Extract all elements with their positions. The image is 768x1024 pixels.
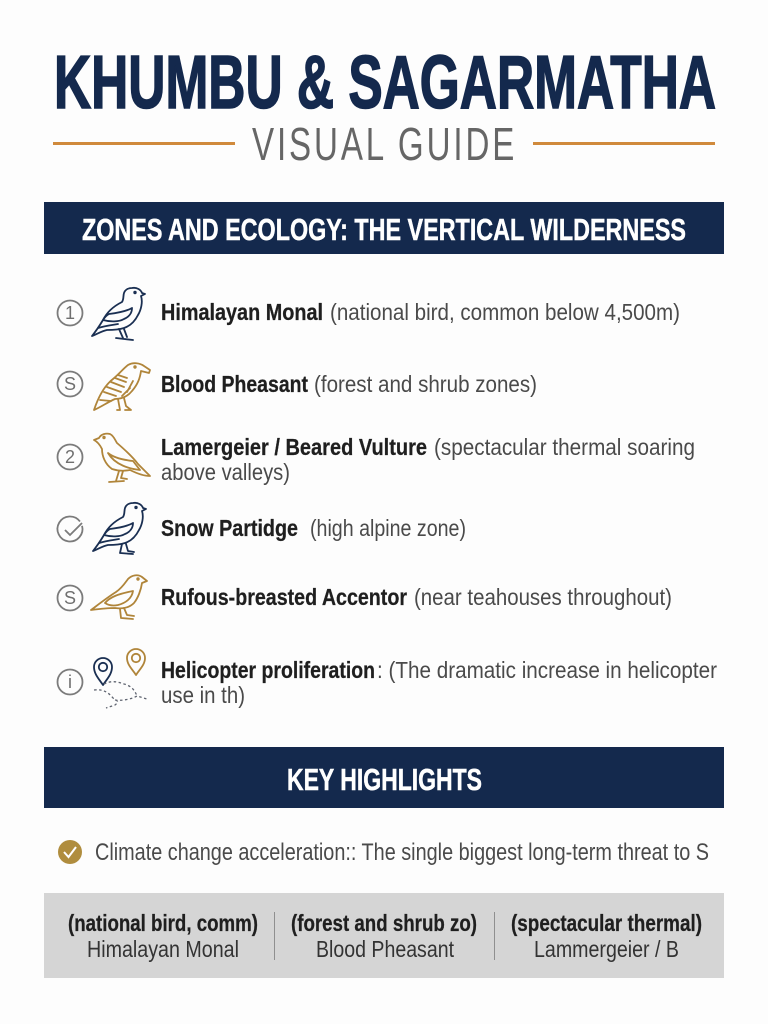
stat: Blood Pheasant [291, 910, 477, 962]
icon: gold bird [91, 575, 147, 619]
list item: Lamergeier / Bearded Vulture [58, 434, 695, 485]
text: Himalayan Monal: Himalayan Monal [161, 299, 323, 325]
section banner: key highlights: KEY HIGHLIGHTS [287, 762, 482, 797]
text: Snow Partridge [161, 515, 466, 541]
icon: info badge: i [68, 672, 72, 692]
stat: Lammergeier: (spectacular thermal) [511, 910, 702, 936]
icon: navy bird [92, 288, 145, 340]
stat: Blood Pheasant: Blood Pheasant [316, 936, 455, 962]
text: Snow Partridge: (high alpine zone) [310, 515, 466, 541]
icon: number 2 badge: 2 [65, 447, 75, 467]
text: Lamergeier / Bearded Vulture: above valleys) [161, 459, 290, 485]
stat: Lammergeier: Lammergeier / B [534, 936, 679, 962]
icon: gold speckled bird [94, 363, 150, 410]
text: Helicopter proliferation: Helicopter proliferation [161, 657, 375, 683]
icon: S badge [58, 372, 82, 396]
subtitle with orange rules [53, 120, 715, 170]
list item: Blood Pheasant [58, 363, 537, 410]
text: Lamergeier / Bearded Vulture [161, 434, 695, 485]
subtitle with orange rules: VISUAL GUIDE [252, 120, 517, 170]
section banner: key highlights [44, 747, 724, 808]
icon: number 1 badge [58, 300, 82, 326]
list item: Himalayan Monal [58, 288, 680, 340]
list item: Helicopter proliferation [58, 649, 717, 708]
list item: Rufous-breasted Accentor [58, 575, 672, 619]
icon: S badge [58, 586, 82, 610]
text: Blood Pheasant [161, 371, 537, 397]
text: Himalayan Monal: (national bird, common below 4,500m) [330, 299, 680, 325]
text: Rufous-breasted Accentor: (near teahouses throughout) [414, 584, 672, 610]
text: Lamergeier / Bearded Vulture: (spectacular thermal soaring [434, 434, 695, 460]
icon: info badge [58, 670, 82, 694]
icon: navy bird [93, 503, 146, 554]
icon: map pins with dashed routes [94, 649, 147, 708]
text: Helicopter proliferation: : (The dramatic increase in helicopter [377, 657, 717, 683]
stat: Blood Pheasant: (forest and shrub zo) [291, 910, 477, 936]
icon: S badge: S [64, 374, 76, 394]
icon: check badge [57, 516, 82, 541]
stat: Himalayan Monal: Himalayan Monal [87, 936, 239, 962]
stat: Himalayan Monal: (national bird, comm) [68, 910, 258, 936]
icon: S badge: S [64, 588, 76, 608]
section banner: zones and ecology [44, 202, 724, 254]
stat: Lammergeier [511, 910, 702, 962]
icon: gold check badge [58, 840, 82, 864]
text: Snow Partridge: Snow Partidge [161, 515, 298, 541]
icon: gold outline bird [94, 434, 150, 482]
text: Helicopter proliferation: use in th) [161, 682, 245, 708]
icon: number 2 badge [58, 444, 82, 470]
highlight: climate change [58, 839, 709, 866]
text: Blood Pheasant: (forest and shrub zones) [314, 371, 537, 397]
icon: number 1 badge: 1 [65, 303, 75, 323]
text: Blood Pheasant: Blood Pheasant [161, 371, 308, 397]
stats panel [44, 893, 724, 978]
stat: Himalayan Monal [68, 910, 258, 962]
list item: Snow Partridge [57, 503, 466, 554]
text: Rufous-breasted Accentor [161, 584, 672, 610]
text: Rufous-breasted Accentor: Rufous-breasted Accentor [161, 584, 407, 610]
text: Himalayan Monal [161, 299, 680, 325]
text: Lamergeier / Bearded Vulture: Lamergeier / Beared Vulture [161, 434, 427, 460]
text: Helicopter proliferation [161, 657, 717, 708]
